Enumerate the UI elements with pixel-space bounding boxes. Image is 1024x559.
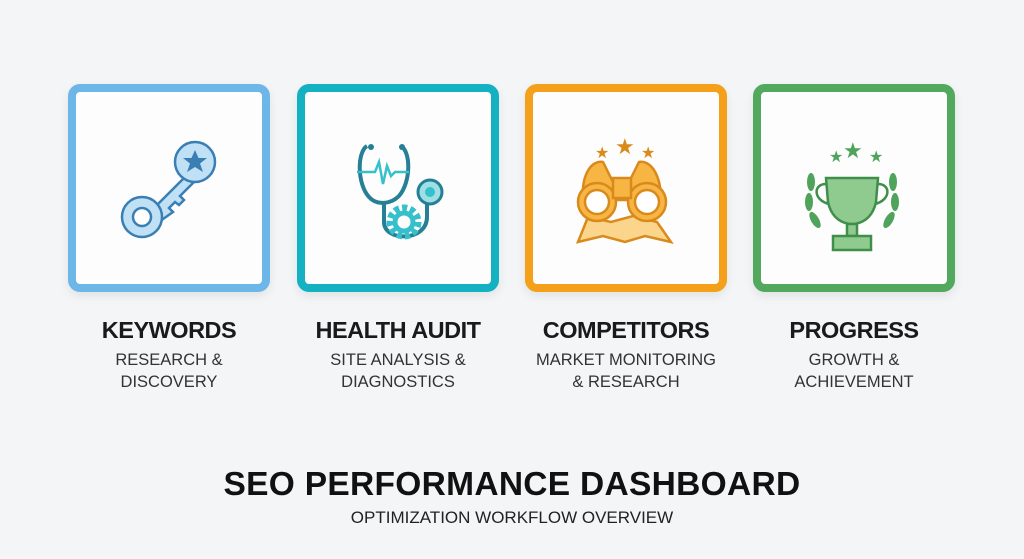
label: keywords: DISCOVERY [121, 373, 217, 391]
card: progress [753, 84, 955, 292]
icon: binoculars and map [576, 134, 674, 244]
icon: binoculars and map: ★ [595, 145, 609, 162]
label: progress: PROGRESS [789, 317, 919, 343]
icon: trophy: ★ [869, 149, 883, 166]
label: progress [789, 317, 919, 391]
icon: trophy: ★ [843, 138, 863, 163]
label: progress: ACHIEVEMENT [794, 373, 914, 391]
label: competitors: COMPETITORS [543, 317, 709, 343]
title: SEO PERFORMANCE DASHBOARD [223, 466, 801, 503]
icon: stethoscope [357, 144, 444, 240]
label: keywords: KEYWORDS [102, 317, 236, 343]
icon: binoculars and map: ★ [615, 134, 635, 159]
icon: binoculars and map: ★ [641, 145, 655, 162]
label: keywords [102, 317, 236, 391]
label: health audit: HEALTH AUDIT [315, 317, 480, 343]
icon: trophy: ★ [829, 149, 843, 166]
label: health audit: SITE ANALYSIS & [330, 351, 466, 369]
label: keywords: RESEARCH & [115, 351, 223, 369]
label: progress: GROWTH & [809, 351, 899, 369]
label: competitors: & RESEARCH [572, 373, 680, 391]
subtitle: OPTIMIZATION WORKFLOW OVERVIEW [351, 508, 673, 527]
label: health audit: DIAGNOSTICS [341, 373, 455, 391]
card: competitors [525, 84, 727, 292]
label: competitors [536, 317, 716, 391]
icon: key [120, 140, 216, 238]
icon: trophy [805, 138, 899, 252]
label: health audit [315, 317, 481, 391]
label: competitors: MARKET MONITORING [536, 351, 716, 369]
card: keywords [68, 84, 270, 292]
card: health audit [297, 84, 499, 292]
